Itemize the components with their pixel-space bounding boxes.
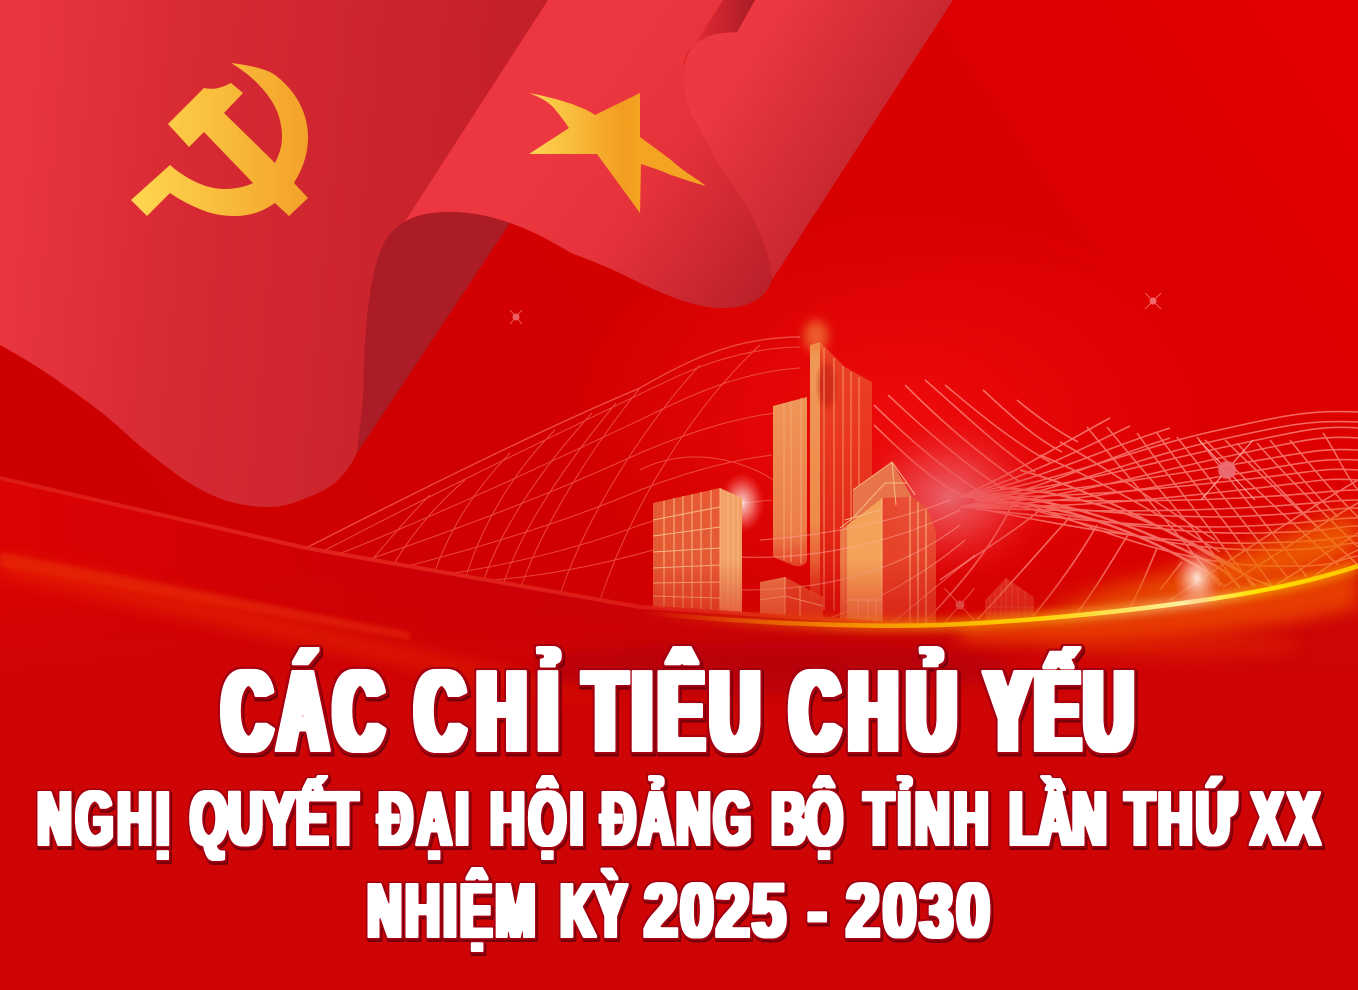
orange glow below swoosh: [960, 568, 1358, 657]
title block: [37, 647, 1320, 954]
left wire mesh: [306, 337, 800, 600]
title: line 3: NHIỆM: [367, 866, 535, 954]
glow: central light: [720, 412, 1055, 582]
building: tall tower: [773, 320, 872, 620]
building: crystal tower: [840, 462, 936, 624]
title: line 1: CHỦ: [790, 647, 956, 777]
glow: white flare on swoosh: [1173, 546, 1221, 610]
title: line 1: CHỈ: [416, 647, 557, 777]
flag: front star panel: [398, 0, 772, 308]
lower background fade behind title: [0, 560, 1358, 990]
title: line 2: XX: [1251, 775, 1320, 862]
ribbon highlight line: [0, 478, 920, 625]
title: line 3: [367, 866, 990, 954]
flag: back curl panel: [683, 0, 953, 280]
title: line 2: TỈNH: [864, 774, 988, 862]
yellow swoosh: [640, 566, 1358, 626]
title: line 2: [37, 774, 1320, 862]
title: line 2: ĐẠI: [378, 775, 469, 862]
title: line 2: NGHỊ: [37, 775, 169, 862]
fan from upper left: [874, 405, 990, 498]
title: line 1: CÁC: [223, 647, 383, 777]
light streaks: [0, 552, 1010, 700]
building: low block: [760, 577, 823, 620]
right wire mesh: [874, 380, 1358, 622]
title: line 3: 2025: [644, 867, 785, 954]
title: line 2: THỨ: [1125, 775, 1236, 862]
wires crossing the buildings: [740, 500, 975, 625]
title: line 1: TIÊU: [584, 647, 759, 777]
title: line 3: -: [808, 869, 826, 954]
strands rising from swoosh: [1223, 503, 1358, 587]
orange glow above swoosh: [1030, 510, 1358, 620]
building: left block: [653, 488, 742, 617]
title: line 3: KỲ: [560, 867, 627, 954]
flag: top dark fold: [695, 0, 755, 45]
strands falling to the right: [1107, 427, 1358, 587]
title: line 2: ĐẢNG: [601, 774, 751, 862]
flag: inner shadow fold: [357, 212, 510, 453]
building: far small tower: [985, 578, 1034, 620]
title: line 2: BỘ: [771, 774, 843, 862]
title: line 2: LẦN: [1009, 775, 1107, 862]
flag: party flag, left panel: [0, 0, 548, 507]
title: line 3: 2030: [846, 867, 990, 954]
icon: hammer and sickle: [131, 63, 308, 216]
icon: gold star: [529, 93, 706, 213]
title: line 2: QUYẾT: [190, 775, 358, 862]
sparkles: [510, 293, 1161, 324]
buildings: [653, 320, 1034, 624]
fan rising to the right: [960, 412, 1358, 533]
lower ribbon area: [0, 478, 1358, 990]
title: line 1: [223, 647, 1133, 777]
diagonals under the mesh: [925, 505, 1012, 622]
title: line 2: HỘI: [490, 774, 583, 862]
sparkle flares: [945, 440, 1255, 622]
title: line 1: YẾU: [986, 647, 1133, 777]
